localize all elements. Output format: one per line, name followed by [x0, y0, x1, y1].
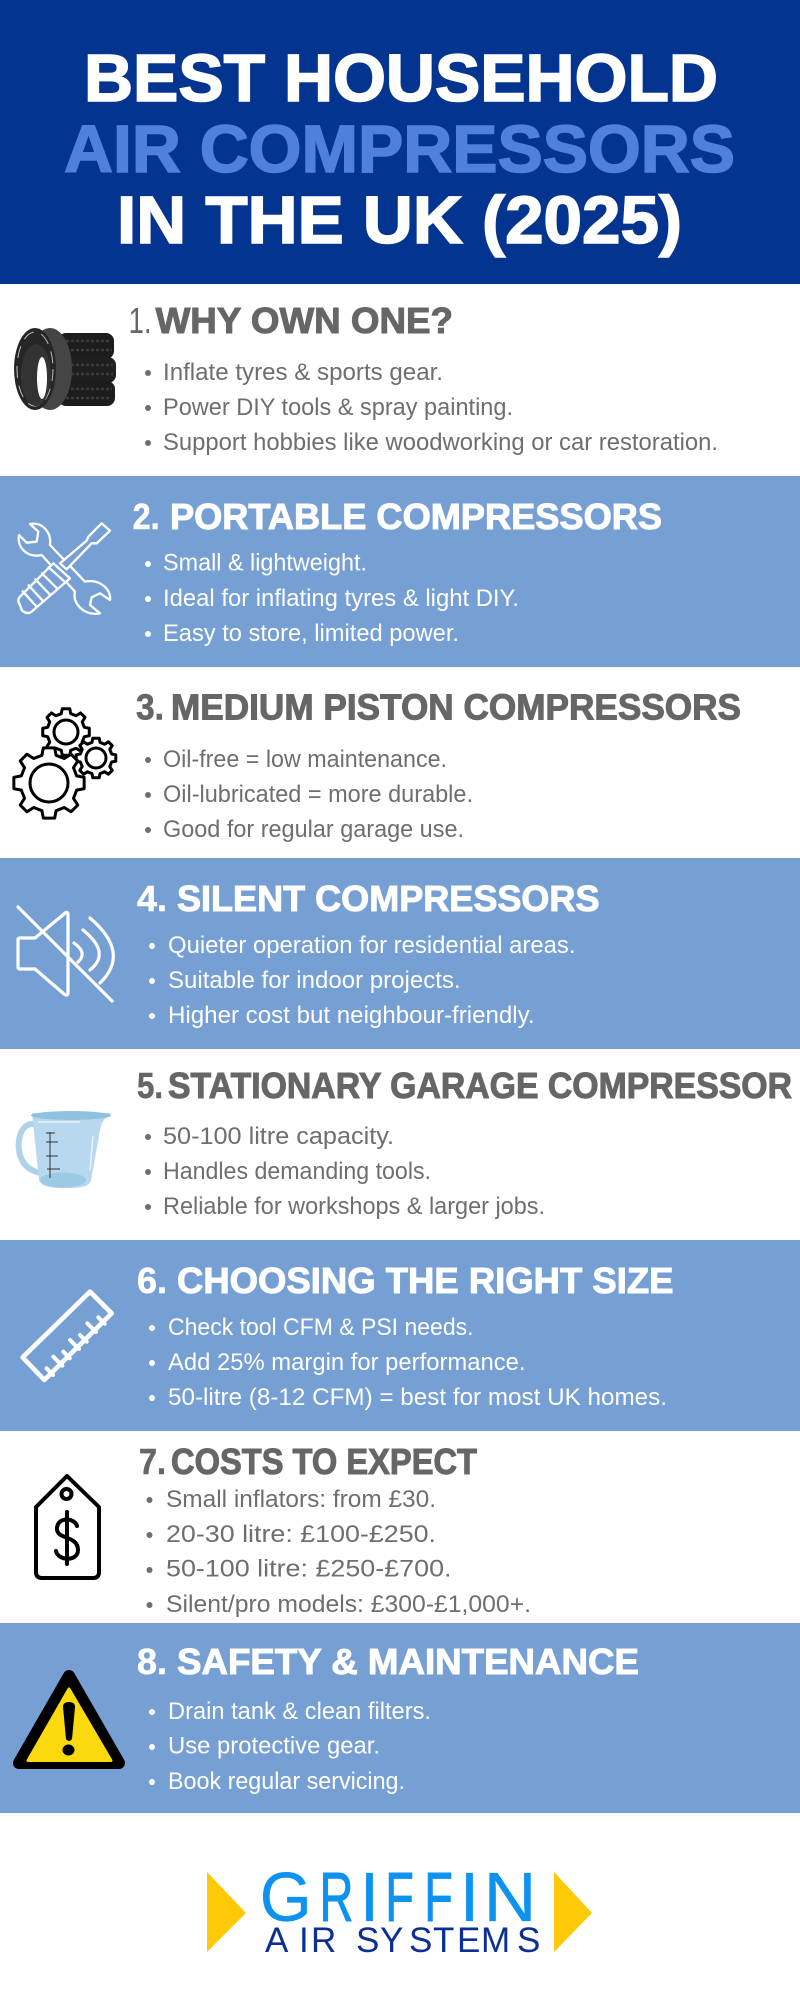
heading: PORTABLE COMPRESSORS — [170, 496, 662, 537]
bullet list: Power DIY tools & spray painting. — [163, 394, 513, 421]
bullet list: Easy to store, limited power. — [163, 620, 459, 647]
logo: Griffin Air Systems — [207, 1858, 592, 1960]
header banner — [0, 0, 800, 284]
icon: left arrow — [207, 1872, 246, 1952]
bullet list: Oil-lubricated = more durable. — [163, 781, 473, 808]
heading: MEDIUM PISTON COMPRESSORS — [171, 686, 741, 728]
panel: choosing the right size — [0, 1240, 800, 1431]
logo wordmark — [260, 1858, 540, 1960]
logo wordmark: N — [484, 1858, 536, 1936]
heading: COSTS TO EXPECT — [171, 1441, 477, 1482]
heading: 3. — [136, 686, 164, 728]
heading: WHY OWN ONE? — [156, 300, 453, 341]
heading: 7. — [139, 1441, 166, 1482]
icon: muted speaker — [18, 907, 113, 1001]
icon: ruler — [23, 1292, 112, 1380]
heading: 1. — [129, 300, 152, 341]
bullet list: Handles demanding tools. — [163, 1158, 431, 1185]
bullet list: Quieter operation for residential areas. — [168, 932, 576, 959]
bullet list — [145, 550, 519, 647]
icon: wrench and screwdriver — [18, 523, 110, 614]
logo wordmark: F — [424, 1858, 453, 1936]
bullet list: 50-litre (8-12 CFM) = best for most UK homes. — [168, 1384, 667, 1411]
panel: safety and maintenance — [0, 1623, 800, 1813]
heading: 5. — [137, 1065, 163, 1106]
heading: 2. — [133, 496, 160, 537]
icon: stacked tyres — [14, 328, 116, 410]
icon: gears — [14, 709, 116, 818]
logo wordmark: I — [360, 1858, 379, 1936]
bullet list: 20-30 litre: £100-£250. — [166, 1521, 436, 1548]
bullet list — [149, 932, 576, 1029]
bullet list — [145, 746, 473, 843]
panel: why own one — [0, 284, 800, 476]
logo wordmark: G — [260, 1858, 312, 1936]
heading: 8. — [137, 1641, 167, 1682]
bullet list: Add 25% margin for performance. — [168, 1349, 526, 1376]
logo wordmark: F — [385, 1858, 414, 1936]
heading: CHOOSING THE RIGHT SIZE — [177, 1260, 674, 1301]
bullet list — [149, 1314, 667, 1411]
bullet list: Inflate tyres & sports gear. — [163, 359, 443, 386]
icon: warning triangle — [19, 1676, 119, 1763]
panel: portable compressors — [0, 476, 800, 667]
bullet list: Reliable for workshops & larger jobs. — [163, 1193, 545, 1220]
title: BEST HOUSEHOLD — [84, 41, 718, 116]
bullet list: Small & lightweight. — [163, 550, 367, 577]
heading: 4. — [137, 878, 167, 919]
bullet list: Ideal for inflating tyres & light DIY. — [163, 585, 519, 612]
bullet list: Oil-free = low maintenance. — [163, 746, 447, 773]
panel: medium piston compressors — [0, 667, 800, 858]
bullet list: Small inflators: from £30. — [166, 1486, 436, 1513]
heading: 6. — [137, 1260, 167, 1301]
bullet list: Book regular servicing. — [168, 1768, 405, 1795]
bullet list: Use protective gear. — [168, 1733, 380, 1760]
panel: stationary garage compressor — [0, 1049, 800, 1240]
icon: right arrow — [554, 1872, 592, 1952]
bullet list: Support hobbies like woodworking or car restoration. — [163, 429, 718, 456]
title: IN THE UK (2025) — [117, 183, 682, 258]
bullet list: Higher cost but neighbour-friendly. — [168, 1002, 535, 1029]
icon: measuring jug — [19, 1111, 111, 1188]
bullet list: Drain tank & clean filters. — [168, 1698, 431, 1725]
heading: SAFETY & MAINTENANCE — [177, 1641, 639, 1682]
panel: silent compressors — [0, 858, 800, 1049]
logo wordmark: I — [460, 1858, 479, 1936]
bullet list: 50-100 litre capacity. — [163, 1123, 394, 1150]
heading: SILENT COMPRESSORS — [177, 878, 600, 919]
bullet list: Check tool CFM & PSI needs. — [168, 1314, 474, 1341]
logo wordmark: AIR SYSTEMS — [265, 1921, 540, 1960]
icon: price tag — [36, 1476, 99, 1578]
bullet list: 50-100 litre: £250-£700. — [166, 1556, 452, 1582]
bullet list — [146, 1486, 531, 1618]
title: AIR COMPRESSORS — [64, 112, 735, 187]
bullet list — [145, 359, 718, 456]
bullet list — [145, 1123, 545, 1220]
logo wordmark: R — [320, 1858, 354, 1936]
panel: costs to expect — [0, 1431, 800, 1623]
bullet list — [149, 1698, 431, 1795]
bullet list: Suitable for indoor projects. — [168, 967, 461, 994]
title — [64, 41, 735, 258]
bullet list: Silent/pro models: £300-£1,000+. — [166, 1591, 531, 1618]
bullet list: Good for regular garage use. — [163, 816, 464, 843]
